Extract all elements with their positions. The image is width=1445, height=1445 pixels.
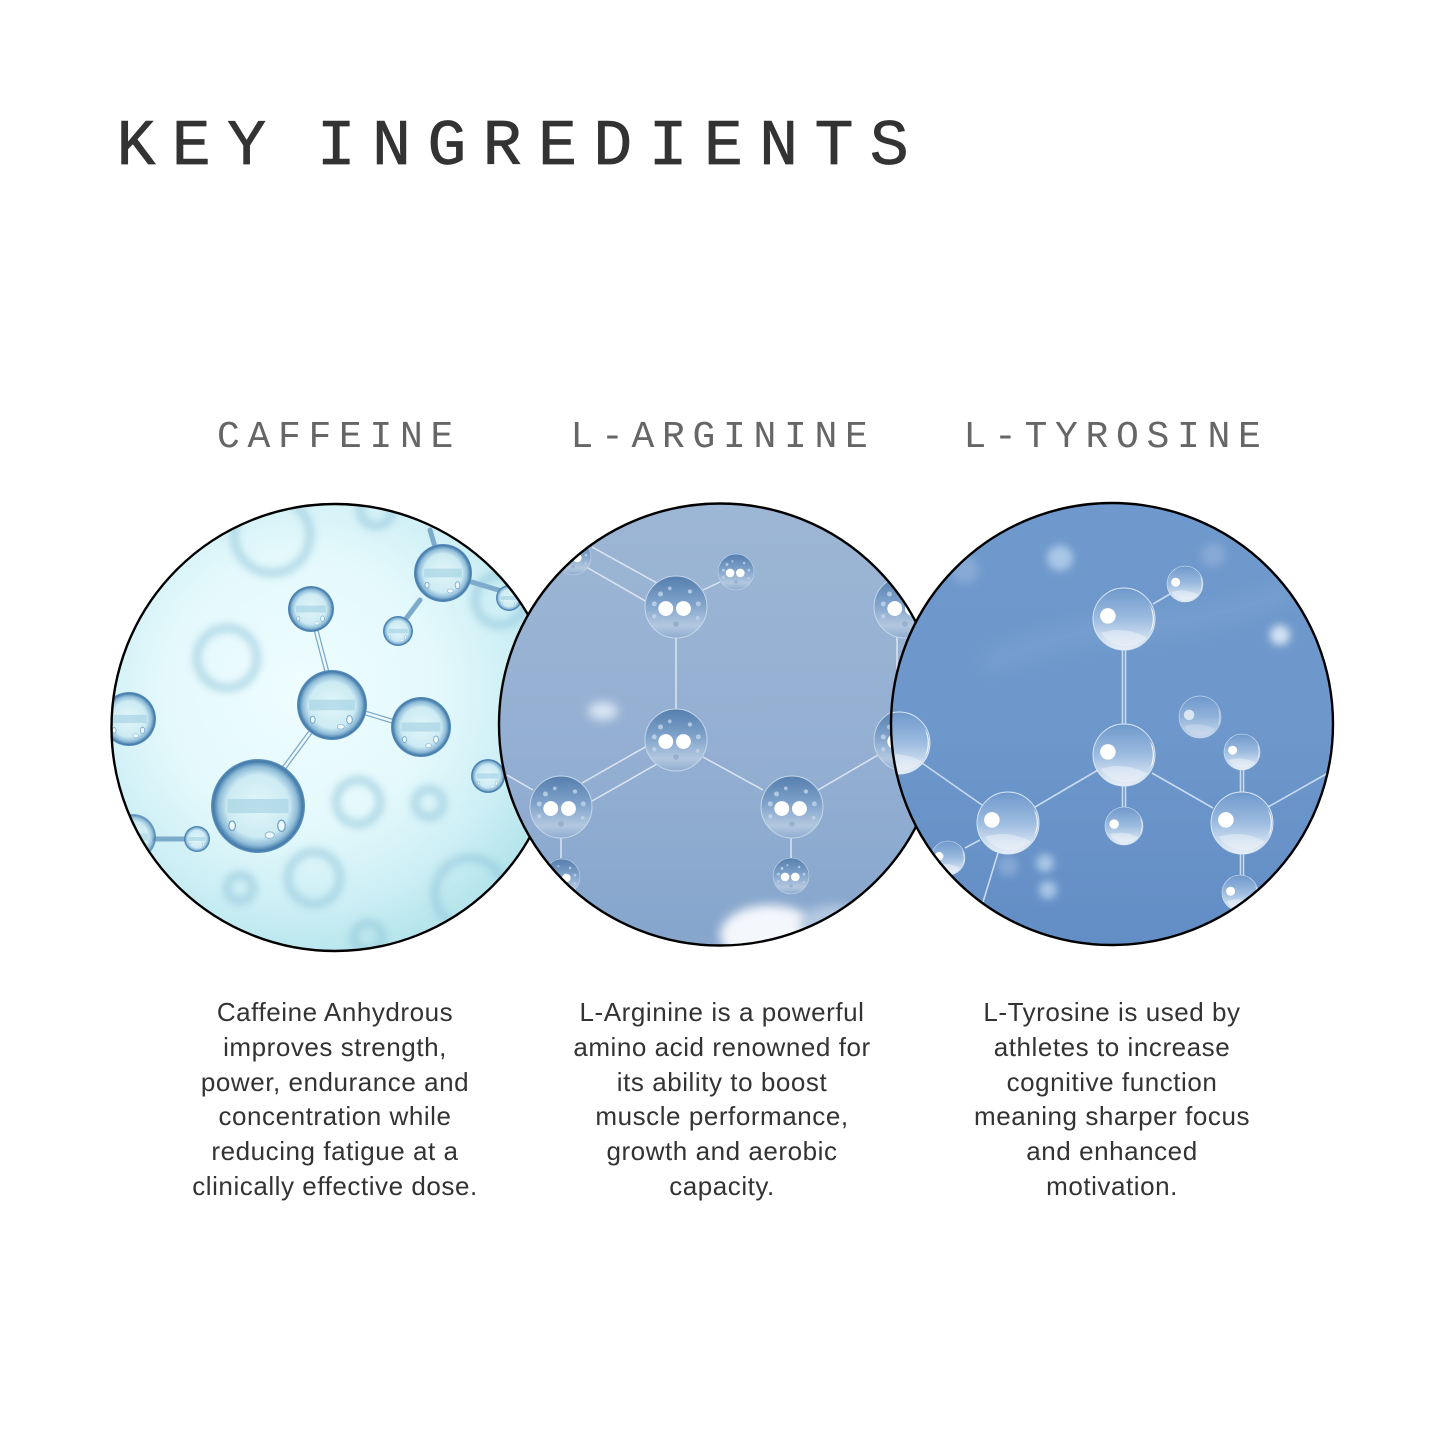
blurred background rings xyxy=(197,494,525,951)
text: l-tyrosine description xyxy=(974,997,1250,1201)
title: KEY INGREDIENTS xyxy=(116,110,925,184)
text: l-tyrosine description: motivation. xyxy=(1046,1171,1178,1201)
text: l-arginine description: growth and aerobic xyxy=(606,1136,838,1166)
text: caffeine description: Caffeine Anhydrous xyxy=(217,997,453,1027)
heading: l-tyrosine: L-TYROSINE xyxy=(963,416,1269,459)
text: caffeine description: clinically effective dose. xyxy=(192,1171,478,1201)
bonds xyxy=(922,594,1328,902)
text: l-tyrosine description: athletes to increase xyxy=(994,1032,1230,1062)
panel: l-arginine molecule circle xyxy=(498,502,916,947)
spheres xyxy=(1093,588,1155,650)
text: l-tyrosine description: and enhanced xyxy=(1026,1136,1198,1166)
text: l-arginine description: muscle performance, xyxy=(595,1101,849,1131)
heading: l-arginine: L-ARGININE xyxy=(570,416,876,459)
text: caffeine description xyxy=(192,997,478,1201)
text: l-arginine description: L-Arginine is a powerful xyxy=(580,997,864,1027)
text: l-arginine description xyxy=(573,997,871,1201)
panel: caffeine molecule circle xyxy=(110,502,530,952)
spheres xyxy=(130,814,156,852)
spheres xyxy=(562,548,592,576)
text: caffeine description: improves strength, xyxy=(223,1032,447,1062)
panel: l-tyrosine molecule circle xyxy=(890,502,1334,946)
blurred highlights xyxy=(584,697,848,944)
text: l-arginine description: amino acid renowned for xyxy=(573,1032,871,1062)
text: l-tyrosine description: cognitive function xyxy=(1007,1067,1217,1097)
circular molecule images xyxy=(110,502,1334,952)
text: l-arginine description: capacity. xyxy=(669,1171,775,1201)
text: caffeine description: reducing fatigue at a xyxy=(211,1136,459,1166)
text: l-tyrosine description: L-Tyrosine is used by xyxy=(983,997,1241,1027)
heading: caffeine: CAFFEINE xyxy=(217,416,461,459)
text: caffeine description: power, endurance and xyxy=(201,1067,469,1097)
blurred swoosh and bokeh xyxy=(985,590,1290,665)
text: caffeine description: concentration while xyxy=(218,1101,452,1131)
text: l-arginine description: its ability to boost xyxy=(617,1067,827,1097)
bonds xyxy=(155,530,505,839)
bonds xyxy=(507,547,897,858)
text: l-tyrosine description: meaning sharper focus xyxy=(974,1101,1250,1131)
